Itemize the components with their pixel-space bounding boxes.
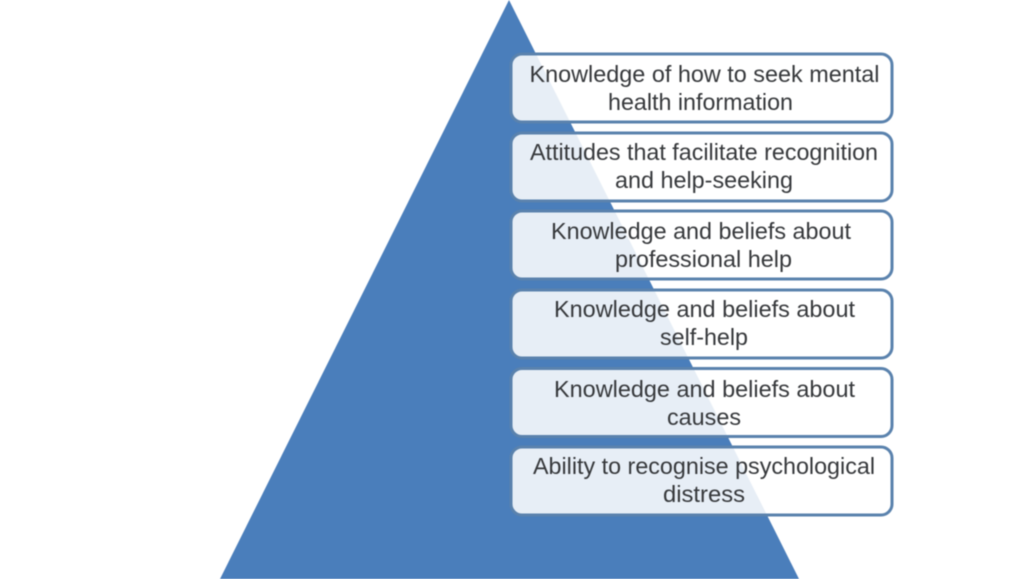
level: knowledge and beliefs about causes: Knowledge and beliefs about [554,376,856,402]
level: knowledge of how to seek mental health information [511,54,892,122]
pyramid triangle [220,0,799,579]
level: knowledge and beliefs about professional help: professional help [615,246,792,272]
level: ability to recognise psychological distress [511,447,892,515]
level: attitudes that facilitate recognition and help-seeking: Attitudes that facilitate recognition [530,139,878,165]
level: knowledge and beliefs about causes: causes [667,404,741,430]
level: attitudes that facilitate recognition and help-seeking: and help-seeking [615,167,793,193]
level: ability to recognise psychological distress: Ability to recognise psychological [533,453,875,479]
level: knowledge and beliefs about self-help: Knowledge and beliefs about [554,296,856,322]
level: knowledge and beliefs about self-help: self-help [660,324,748,350]
level: knowledge of how to seek mental health information: health information [608,89,793,115]
level: knowledge and beliefs about professional help [511,211,892,279]
level: knowledge and beliefs about professional help: Knowledge and beliefs about [551,218,852,244]
level: knowledge and beliefs about causes [511,368,892,436]
level: knowledge and beliefs about self-help [511,290,892,358]
level: knowledge of how to seek mental health information: Knowledge of how to seek mental [530,61,880,87]
level: attitudes that facilitate recognition and help-seeking [511,133,892,201]
level: ability to recognise psychological distress: distress [663,481,745,507]
